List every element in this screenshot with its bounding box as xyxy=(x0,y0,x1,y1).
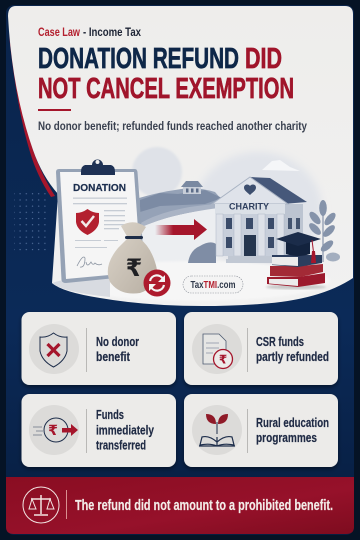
cap xyxy=(286,240,310,256)
label: benefit xyxy=(96,349,131,364)
icon: open book with sprout xyxy=(192,405,242,455)
illustration: ground xyxy=(60,261,330,301)
top book xyxy=(272,255,322,267)
logo: TaxTMI.com xyxy=(183,276,243,293)
label: Rural education xyxy=(256,415,329,430)
eyebrow: Case Law xyxy=(38,25,81,39)
panel: hero paper xyxy=(8,6,353,306)
icon: shield with cross xyxy=(29,324,79,374)
label xyxy=(96,407,155,452)
label: transferred xyxy=(96,438,146,452)
title: DID xyxy=(245,43,282,75)
icon: document with rupee xyxy=(192,324,242,374)
label xyxy=(256,334,329,364)
illustration: clipboard xyxy=(56,160,145,283)
icon: scales xyxy=(23,487,59,523)
illustration: plant xyxy=(307,200,340,262)
title xyxy=(38,43,294,105)
panel: rural education xyxy=(184,394,338,467)
signature xyxy=(77,257,102,267)
label: Funds xyxy=(96,407,124,422)
eyebrow xyxy=(38,25,141,39)
banner: conclusion xyxy=(6,477,354,534)
panel: no donor benefit xyxy=(22,312,176,385)
illustration: charity building: CHARITY xyxy=(229,202,269,212)
illustration: shrub xyxy=(188,242,216,263)
label: CSR funds xyxy=(256,334,304,349)
illustration: ground shadow xyxy=(52,276,110,297)
label xyxy=(96,334,139,364)
subtitle: No donor benefit; refunded funds reached another charity xyxy=(38,119,307,133)
icon: rupee coin with arrow: ₹ xyxy=(48,423,58,439)
eyebrow: - Income Tax xyxy=(83,25,141,39)
icon: shield xyxy=(76,209,99,235)
panel: funds transferred xyxy=(22,394,176,467)
icon: refund badge xyxy=(144,270,170,296)
arrow: refund flow xyxy=(155,219,207,240)
illustration: landscape xyxy=(132,147,322,272)
title: DONATION REFUND xyxy=(38,43,239,75)
label: programmes xyxy=(256,430,317,445)
logo: TaxTMI.com: TaxTMI.com xyxy=(190,280,236,291)
icon: document with rupee: ₹ xyxy=(219,352,227,366)
illustration: money bag: ₹ xyxy=(126,254,142,282)
illustration: money bag xyxy=(108,222,157,294)
bottom book xyxy=(267,273,325,287)
label: immediately xyxy=(96,422,155,438)
panel: csr funds xyxy=(184,312,338,385)
icon: rupee coin with arrow xyxy=(29,405,79,455)
illustration: charity building xyxy=(212,177,307,263)
illustration: books and graduation cap xyxy=(266,232,326,290)
label: donation: DONATION xyxy=(73,182,126,194)
middle book xyxy=(270,264,323,277)
label: partly refunded xyxy=(256,349,329,364)
label: No donor xyxy=(96,334,139,349)
label xyxy=(256,415,329,445)
title underline xyxy=(38,109,71,111)
